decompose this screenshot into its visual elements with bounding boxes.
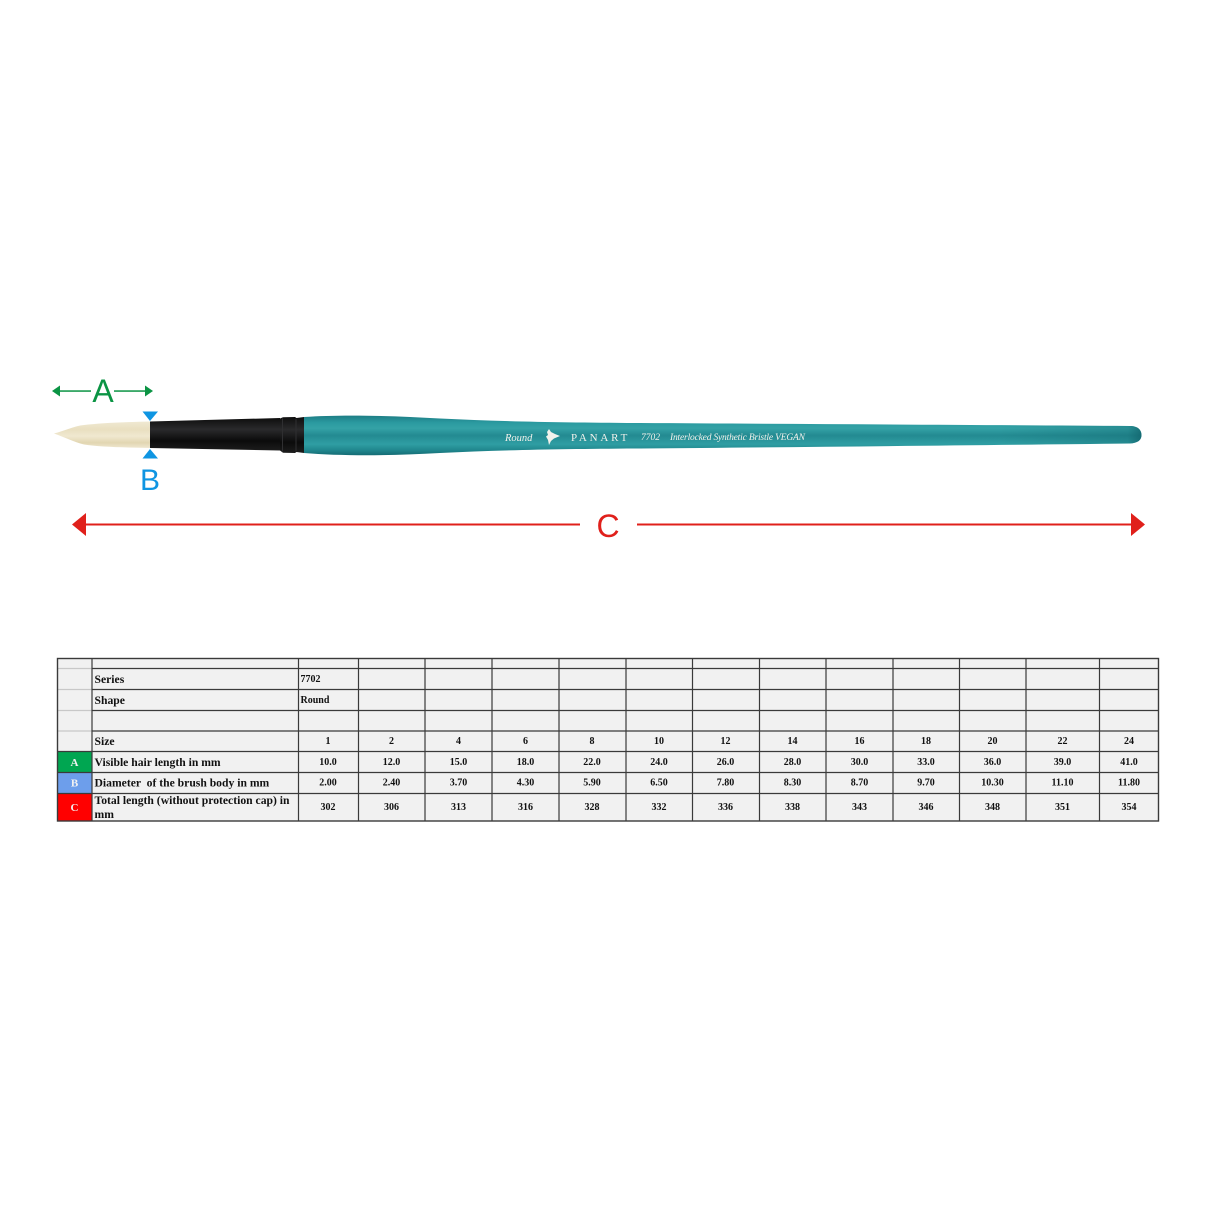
brush ferrule [150, 418, 280, 450]
handle imprint: PANART [571, 432, 630, 444]
size row: 18 [921, 736, 931, 747]
size row: 4 [456, 736, 461, 747]
row labels: Series [94, 673, 125, 686]
size row: 6 [523, 736, 528, 747]
size row: 16 [854, 736, 864, 747]
dimension A: A [92, 373, 114, 409]
size row: 20 [988, 736, 998, 747]
handle imprint: Interlocked Synthetic Bristle VEGAN [669, 433, 806, 443]
hair length row: 41.0 [1120, 757, 1138, 768]
handle end shading [1000, 425, 1142, 445]
diameter row: 11.10 [1052, 778, 1073, 788]
hair length row: 22.0 [583, 757, 601, 768]
row labels: Diameter of the brush body in mm [94, 776, 270, 790]
total length row: 316 [518, 802, 533, 813]
diameter row: 6.50 [650, 778, 668, 788]
diameter row: 2.40 [383, 778, 400, 788]
row labels: Shape [94, 694, 125, 707]
total length row: 348 [985, 802, 1000, 813]
dimension C: C [596, 508, 620, 544]
total length row: 302 [320, 802, 336, 813]
diameter row: 8.70 [851, 778, 868, 788]
legend cell A [57, 751, 92, 772]
legend cell C: C [71, 802, 79, 814]
size row: 22 [1058, 736, 1068, 747]
brush handle [304, 416, 1142, 455]
handle imprint: 7702 [641, 433, 660, 443]
total length row: 332 [652, 802, 666, 813]
total length row: 338 [785, 802, 800, 813]
brush illustration [54, 416, 1142, 455]
total length row: 313 [451, 802, 466, 813]
dimension C [72, 508, 1145, 544]
diameter row: 8.30 [784, 778, 801, 788]
row labels: Size [94, 735, 115, 748]
hair length row [319, 757, 1138, 768]
legend cell B [57, 772, 92, 793]
series and shape values: Round [300, 695, 330, 706]
dimension B [140, 412, 160, 497]
legend cell C [57, 793, 92, 821]
total length row: 343 [852, 802, 867, 813]
hair length row: 33.0 [917, 757, 935, 768]
size row: 24 [1124, 736, 1134, 747]
hair length row: 18.0 [517, 757, 534, 768]
logo mark [546, 429, 560, 445]
size row [326, 736, 1134, 747]
row labels: mm [94, 808, 114, 821]
total length row: 336 [718, 802, 733, 813]
ferrule crimp [280, 417, 304, 453]
diameter row: 9.70 [917, 778, 935, 788]
diameter row: 2.00 [319, 778, 337, 788]
handle imprint: Round [504, 433, 533, 444]
size row: 2 [389, 736, 394, 747]
diameter row: 7.80 [717, 778, 734, 788]
legend cell B: B [71, 778, 79, 790]
diameter row [319, 778, 1140, 788]
hair length row: 30.0 [851, 757, 868, 768]
diameter row: 10.30 [981, 778, 1004, 788]
handle imprint [504, 429, 806, 445]
diameter row: 4.30 [517, 778, 534, 788]
row labels [94, 673, 290, 821]
brush hair [54, 422, 151, 448]
dimension A [52, 373, 153, 409]
hair length row: 26.0 [717, 757, 734, 768]
row labels: Total length (without protection cap) in [94, 794, 290, 807]
hair length row: 36.0 [984, 757, 1001, 768]
diameter row: 3.70 [450, 778, 467, 788]
diameter row: 11.80 [1118, 778, 1140, 788]
size row: 12 [720, 736, 730, 747]
total length row: 351 [1055, 802, 1070, 813]
size row: 10 [654, 736, 664, 747]
total length row: 328 [584, 802, 600, 813]
size row: 14 [788, 736, 798, 747]
hair length row: 15.0 [450, 757, 467, 768]
hair length row: 39.0 [1054, 757, 1071, 768]
row labels: Visible hair length in mm [94, 756, 221, 769]
hair length row: 24.0 [650, 757, 668, 768]
diameter row: 5.90 [583, 778, 601, 788]
series and shape values [300, 674, 330, 706]
hair length row: 10.0 [319, 757, 337, 768]
size row: 1 [326, 736, 330, 747]
total length row: 346 [918, 802, 934, 813]
specification table [57, 658, 1158, 821]
total length row: 354 [1122, 802, 1136, 813]
hair length row: 12.0 [383, 757, 400, 768]
total length row: 306 [384, 802, 399, 813]
series and shape values: 7702 [300, 674, 320, 685]
size row: 8 [590, 736, 594, 747]
total length row [320, 802, 1136, 813]
dimension B: B [140, 464, 160, 497]
hair length row: 28.0 [784, 757, 801, 768]
legend cell A: A [71, 757, 79, 769]
